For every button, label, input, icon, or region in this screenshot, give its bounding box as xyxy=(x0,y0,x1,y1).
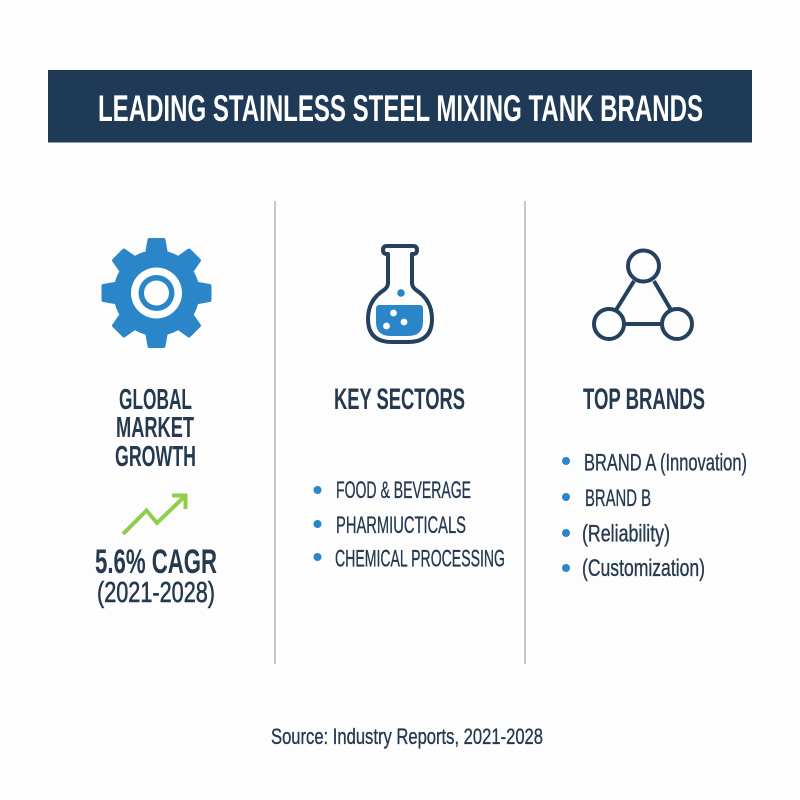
heading: key sectors: KEY SECTORS xyxy=(334,383,465,416)
stat period: (2021-2028) xyxy=(97,577,215,609)
icon: growth arrow xyxy=(123,496,186,534)
list: brands: (Reliability) xyxy=(582,520,670,548)
icon: network triangle xyxy=(594,250,692,339)
heading: global market growth xyxy=(115,384,196,473)
heading: global market growth: GROWTH xyxy=(115,441,196,473)
panel: key sectors xyxy=(314,246,505,572)
heading: global market growth: MARKET xyxy=(116,412,194,444)
list: sectors: PHARMIUCTICALS xyxy=(336,512,466,539)
stat: CAGR: 5.6% CAGR xyxy=(95,543,217,581)
list: brands: BRAND B xyxy=(585,485,651,512)
panel: top brands xyxy=(562,250,747,582)
panel: global market growth xyxy=(95,240,217,609)
list: sectors: CHEMICAL PROCESSING xyxy=(335,546,505,572)
source note: Source: Industry Reports, 2021-2028 xyxy=(271,724,543,749)
heading: top brands: TOP BRANDS xyxy=(583,383,705,416)
title banner xyxy=(48,70,752,142)
icon: flask xyxy=(368,246,432,342)
icon: gear xyxy=(104,240,210,346)
list: brands: (Customization) xyxy=(582,555,705,582)
list: sectors xyxy=(314,477,505,572)
list: brands xyxy=(562,450,747,582)
list: sectors: FOOD & BEVERAGE xyxy=(336,477,471,504)
heading: global market growth: GLOBAL xyxy=(119,384,192,416)
